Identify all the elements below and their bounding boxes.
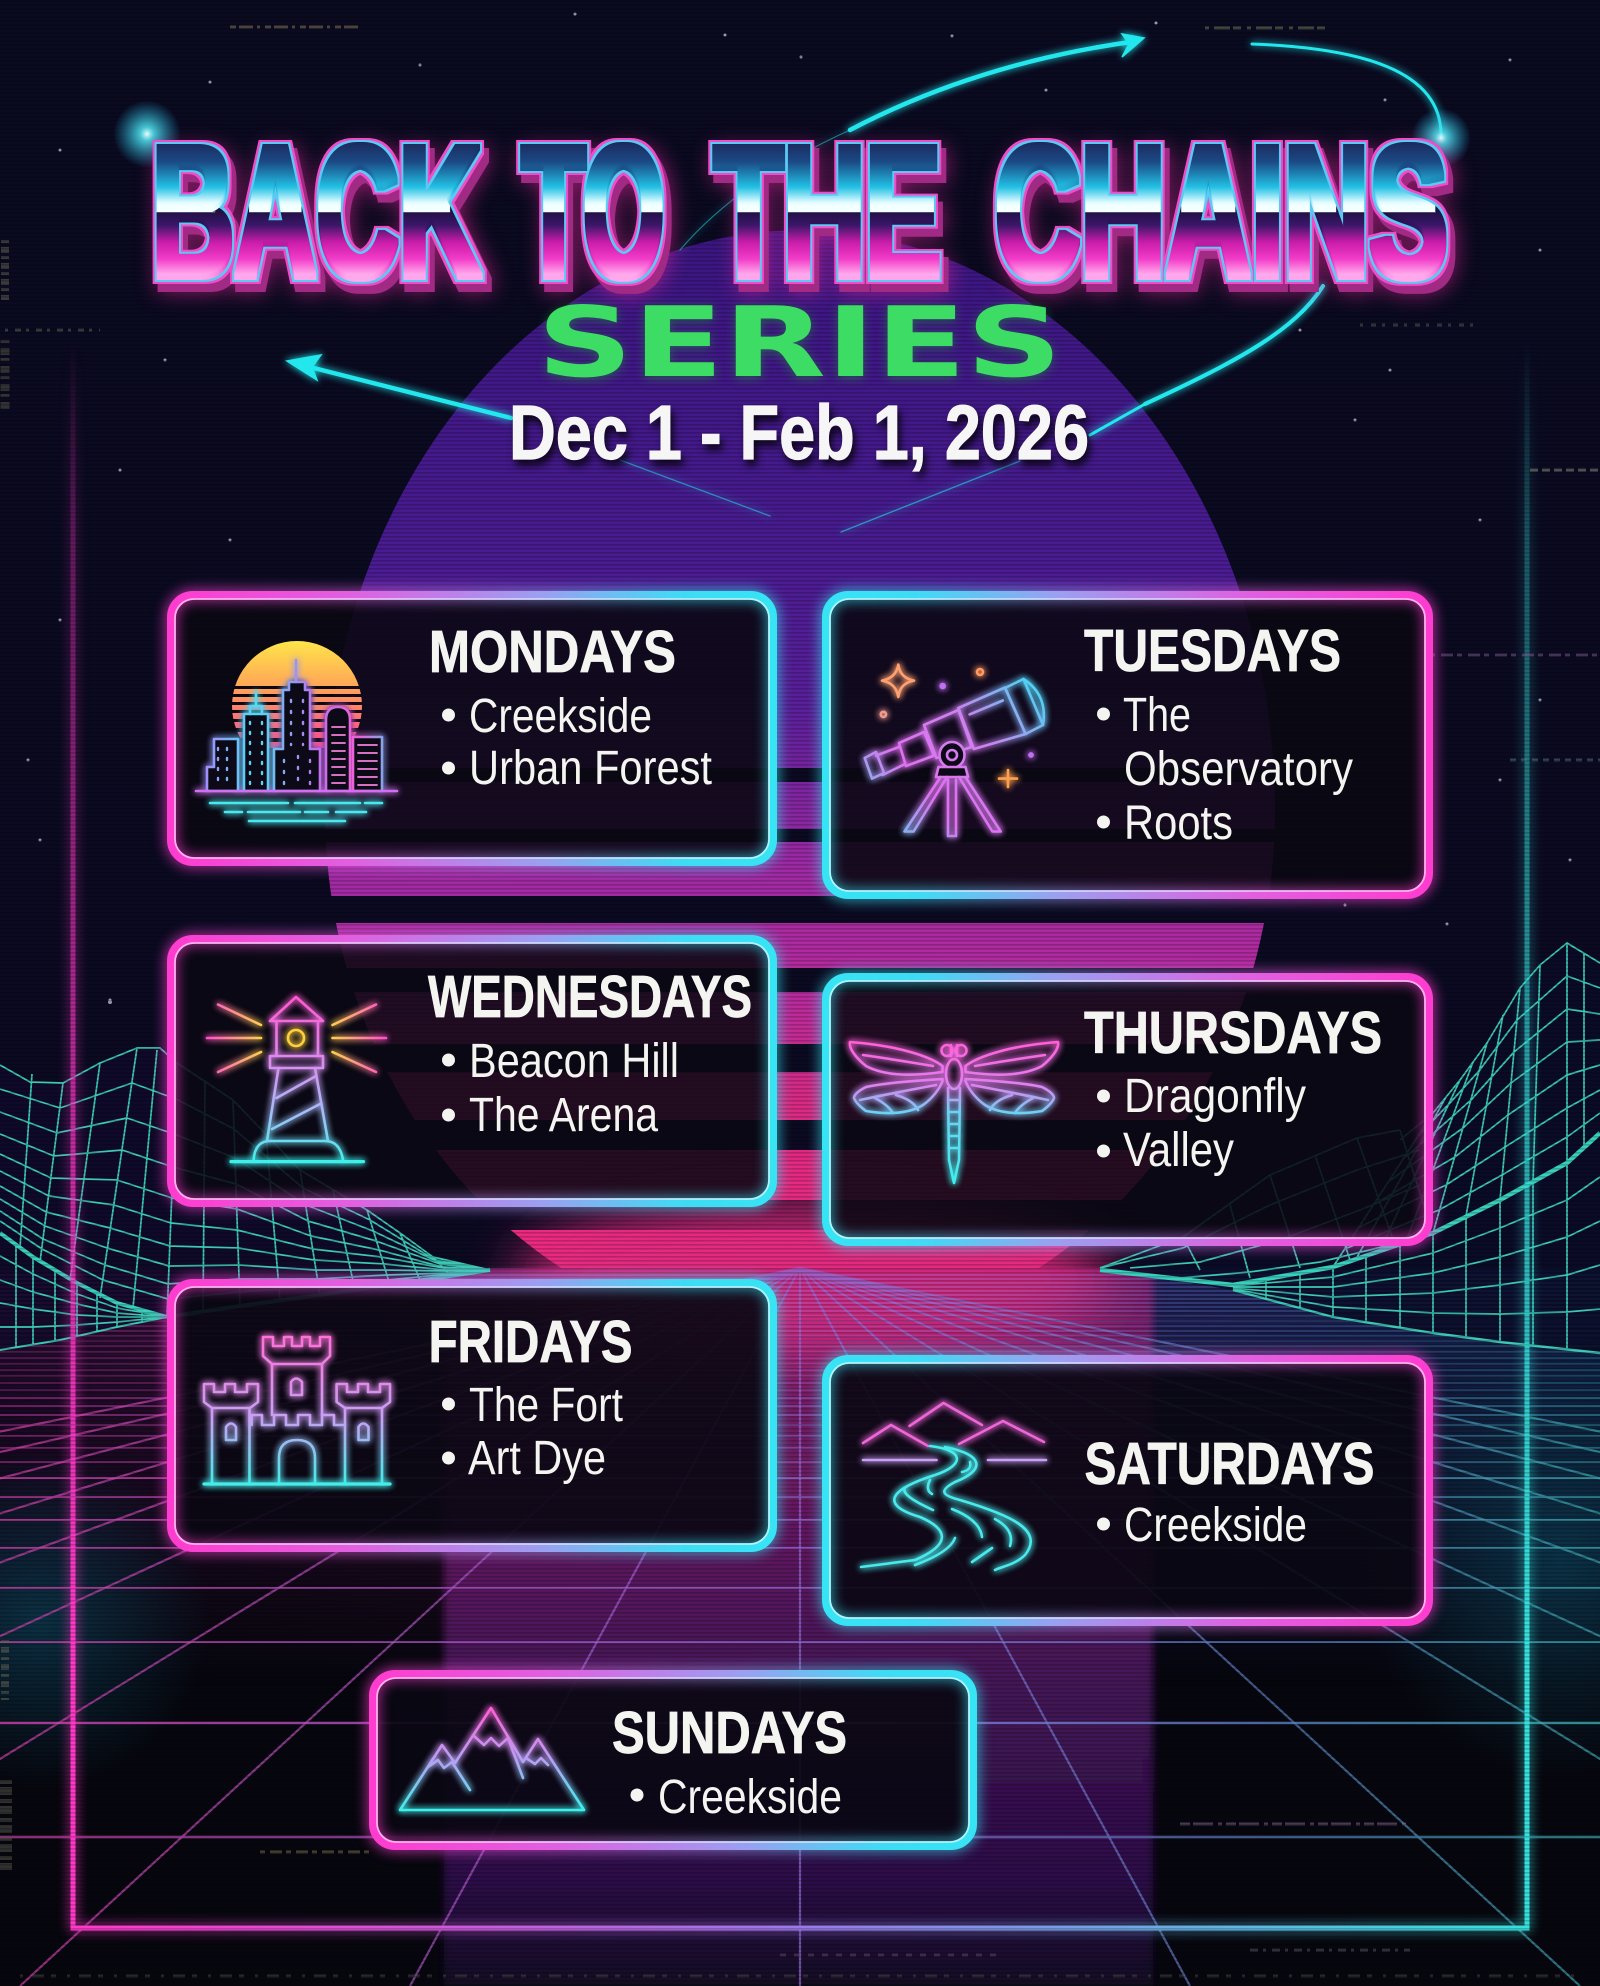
- date: Dec 1 - Feb 1, 2026: [509, 390, 1089, 476]
- icon: telescope: [865, 665, 1044, 836]
- list: Wednesday trails: Beacon Hill: [469, 1035, 679, 1088]
- floor perspective grid: [0, 1268, 1600, 1986]
- heading: Wednesdays: WEDNESDAYS: [428, 964, 752, 1030]
- heading: Thursdays: THURSDAYS: [1084, 1000, 1382, 1066]
- list: Tuesday trails: The: [1123, 689, 1191, 742]
- subtitle: SERIES: SERIES: [537, 286, 1062, 399]
- panel: Wednesdays: [171, 939, 773, 1203]
- flare glints: [113, 100, 1471, 168]
- icon: dragonfly: [850, 1042, 1058, 1183]
- heading: Mondays: MONDAYS: [429, 619, 676, 685]
- arrows: [287, 34, 1441, 532]
- arrow: top right: [680, 34, 1144, 250]
- panel: Mondays: [171, 595, 773, 862]
- icon: castle: [204, 1337, 390, 1484]
- title: TO: [522, 107, 664, 318]
- list: Thursday trails: Dragonfly: [1124, 1070, 1306, 1123]
- list: Tuesday trails: Observatory: [1124, 743, 1353, 796]
- stars: [26, 12, 1572, 1004]
- panel: Thursdays: [826, 977, 1429, 1242]
- outer neon frame: [73, 340, 1527, 1928]
- title: THE: [714, 107, 941, 318]
- title: BACK: [152, 107, 481, 318]
- panel: Tuesdays: [826, 595, 1429, 895]
- list: Monday trails: Urban Forest: [469, 742, 712, 795]
- list: Thursday trails: Valley: [1123, 1124, 1234, 1177]
- panel: Saturdays: [826, 1359, 1429, 1622]
- list: Saturday trails: Creekside: [1124, 1499, 1307, 1552]
- arrow: lower right: [841, 286, 1323, 532]
- list: Thursday trails: [1097, 1070, 1306, 1177]
- list: Friday trails: The Fort: [469, 1379, 623, 1432]
- heading: Sundays: SUNDAYS: [612, 1700, 847, 1766]
- icon: city skyline at sunset: [196, 641, 397, 821]
- list: Monday trails: Creekside: [469, 690, 652, 743]
- list: Tuesday trails: Roots: [1124, 797, 1233, 850]
- heading: Fridays: FRIDAYS: [429, 1309, 633, 1375]
- list: Wednesday trails: [442, 1035, 679, 1142]
- list: Monday trails: [442, 690, 712, 795]
- panel: Fridays: [171, 1283, 773, 1548]
- wireframe mountains right: [1100, 943, 1600, 1353]
- icon: mountains: [400, 1708, 584, 1810]
- list: Friday trails: [442, 1379, 623, 1485]
- panel: Sundays: [373, 1674, 973, 1846]
- title: [152, 107, 1448, 318]
- icon: river and mountains: [861, 1403, 1046, 1570]
- list: Friday trails: Art Dye: [468, 1432, 606, 1485]
- arrow: lower left: [287, 355, 770, 516]
- icon: lighthouse: [207, 997, 386, 1162]
- list: Wednesday trails: The Arena: [469, 1089, 658, 1142]
- wireframe mountains left: [0, 1048, 490, 1350]
- floor base and glow: [0, 1198, 1600, 1986]
- sunset sun with bands: [325, 230, 1275, 1340]
- list: Tuesday trails: [1097, 689, 1353, 850]
- arrow: right curve: [1252, 44, 1441, 136]
- list: Sunday trails: Creekside: [658, 1771, 842, 1824]
- heading: Tuesdays: TUESDAYS: [1084, 618, 1341, 684]
- heading: Saturdays: SATURDAYS: [1084, 1431, 1374, 1497]
